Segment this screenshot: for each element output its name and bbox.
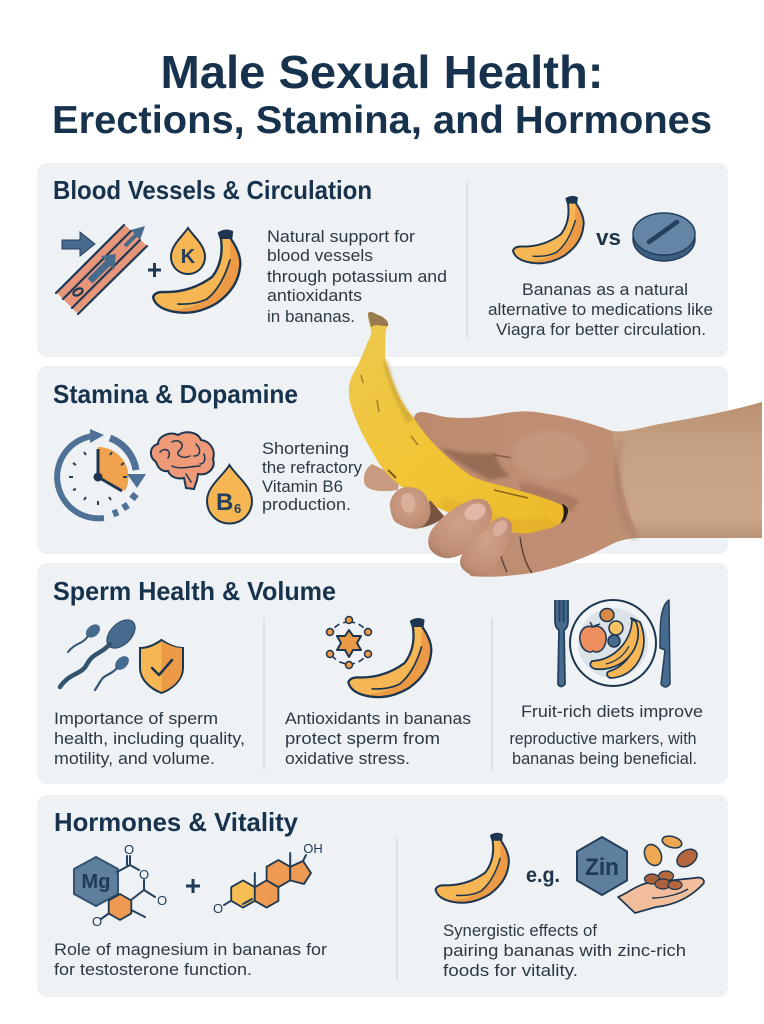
text: alternative to medications: alternative to medications like (488, 301, 713, 319)
icon: zinc hexagon (577, 837, 627, 895)
icon: magnesium molecule (74, 842, 167, 929)
heading: blood vessels: Blood Vessels & Circulation (53, 175, 372, 205)
text: natural support: blood vessels (267, 247, 373, 265)
title: Male Sexual Health: (160, 46, 604, 98)
icon: plate with fruit (570, 600, 656, 686)
text: antioxidants protect sperm: protect sperm from (285, 730, 440, 748)
text: natural support (267, 228, 447, 326)
label: e.g.: e.g. (526, 864, 560, 887)
text: fruit-rich diets: bananas being beneficial. (512, 750, 697, 768)
text: shortening refractory: Shortening (262, 440, 349, 458)
text: synergistic effects: pairing bananas with zinc-rich (443, 942, 686, 960)
panel: hormones and vitality (37, 795, 728, 997)
text: antioxidants protect sperm: Antioxidants in bananas (285, 710, 471, 728)
text: shortening refractory (262, 440, 363, 514)
text: importance of sperm health (54, 710, 245, 768)
text: importance of sperm health: health, including quality, (54, 730, 245, 748)
text: natural support: Natural support for (267, 228, 416, 246)
heading: hormones: Hormones & Vitality (54, 807, 299, 837)
text: antioxidants protect sperm: oxidative stress. (285, 750, 410, 768)
icon: hand with nuts (618, 834, 704, 913)
text: importance of sperm health: motility, and volume. (54, 750, 215, 768)
heading: stamina: Stamina & Dopamine (53, 379, 298, 409)
icon: brain (151, 432, 214, 489)
text: synergistic effects: foods for vitality. (443, 962, 578, 980)
icon: magnesium molecule: O (92, 914, 102, 929)
fingers wrapped around banana (390, 487, 512, 576)
icon: banana (348, 619, 431, 697)
icon: pill (633, 213, 695, 261)
icon: banana (436, 834, 509, 903)
text: alternative to medications (488, 281, 713, 339)
text: synergistic effects: Synergistic effects of (443, 922, 597, 940)
plus sign (148, 263, 161, 277)
plus sign (186, 879, 200, 893)
icon: magnesium molecule: O (139, 867, 149, 882)
icon: fork (555, 600, 568, 686)
text: alternative to medications: Bananas as a natural (522, 281, 688, 299)
title: Erections, Stamina, and Hormones (52, 99, 712, 142)
title (52, 46, 712, 142)
text: role of magnesium: Role of magnesium in bananas for (54, 941, 328, 959)
text: natural support: through potassium and (267, 268, 447, 286)
text: fruit-rich diets (510, 703, 703, 768)
text: role of magnesium (54, 941, 328, 979)
hand and forearm (414, 402, 762, 577)
label: vs: vs (596, 225, 621, 250)
icon: vitamin B6 drop: 6 (234, 501, 241, 516)
text: fruit-rich diets: reproductive markers, with (510, 730, 696, 748)
panel: sperm health and volume (37, 563, 728, 784)
palm shadows and creases (440, 431, 636, 573)
text: role of magnesium: for testosterone function. (54, 961, 252, 979)
text: shortening refractory: Vitamin B6 (262, 478, 343, 496)
text: importance of sperm health: Importance of sperm (54, 710, 218, 728)
photo: hand holding banana (349, 312, 762, 577)
icon: blood vessel (56, 225, 147, 314)
icon: clock with arrows (57, 429, 146, 518)
text: shortening refractory: the refractory (262, 459, 363, 477)
icon: testosterone molecule: O (213, 901, 223, 916)
text: alternative to medications: Viagra for better circulation. (496, 321, 706, 339)
icon: banana (153, 231, 240, 313)
icon: vitamin B6 drop: B (216, 489, 233, 516)
icon: testosterone molecule (213, 841, 323, 916)
icon: potassium drop (171, 228, 205, 274)
heading: sperm health: Sperm Health & Volume (53, 576, 336, 606)
forearm shading (612, 402, 762, 538)
lower finger behind banana (364, 464, 400, 491)
text: antioxidants protect sperm (285, 710, 471, 768)
text: natural support: antioxidants (267, 287, 362, 305)
icon: magnesium molecule: O (124, 842, 134, 857)
icon: banana comparison (513, 197, 584, 263)
icon: vitamin B6 drop (207, 465, 252, 524)
icon: testosterone molecule: OH (303, 841, 323, 856)
icon: knife (660, 600, 670, 687)
icon: potassium drop: K (181, 246, 196, 268)
panel: stamina and dopamine (37, 366, 728, 554)
text: natural support: in bananas. (267, 308, 355, 326)
text: synergistic effects (443, 922, 686, 980)
icon: zinc hexagon: Zin (585, 854, 619, 881)
banana fruit (349, 312, 567, 533)
text: fruit-rich diets: Fruit-rich diets improve (521, 703, 703, 721)
panel: blood vessels and circulation (37, 163, 728, 357)
icon: antioxidant star (326, 616, 372, 668)
icon: magnesium molecule: Mg (82, 871, 110, 893)
icon: magnesium molecule: O (157, 893, 167, 908)
icon: shield with check (140, 640, 183, 693)
text: shortening refractory: production. (262, 496, 351, 514)
icon: sperm cells (60, 615, 140, 690)
